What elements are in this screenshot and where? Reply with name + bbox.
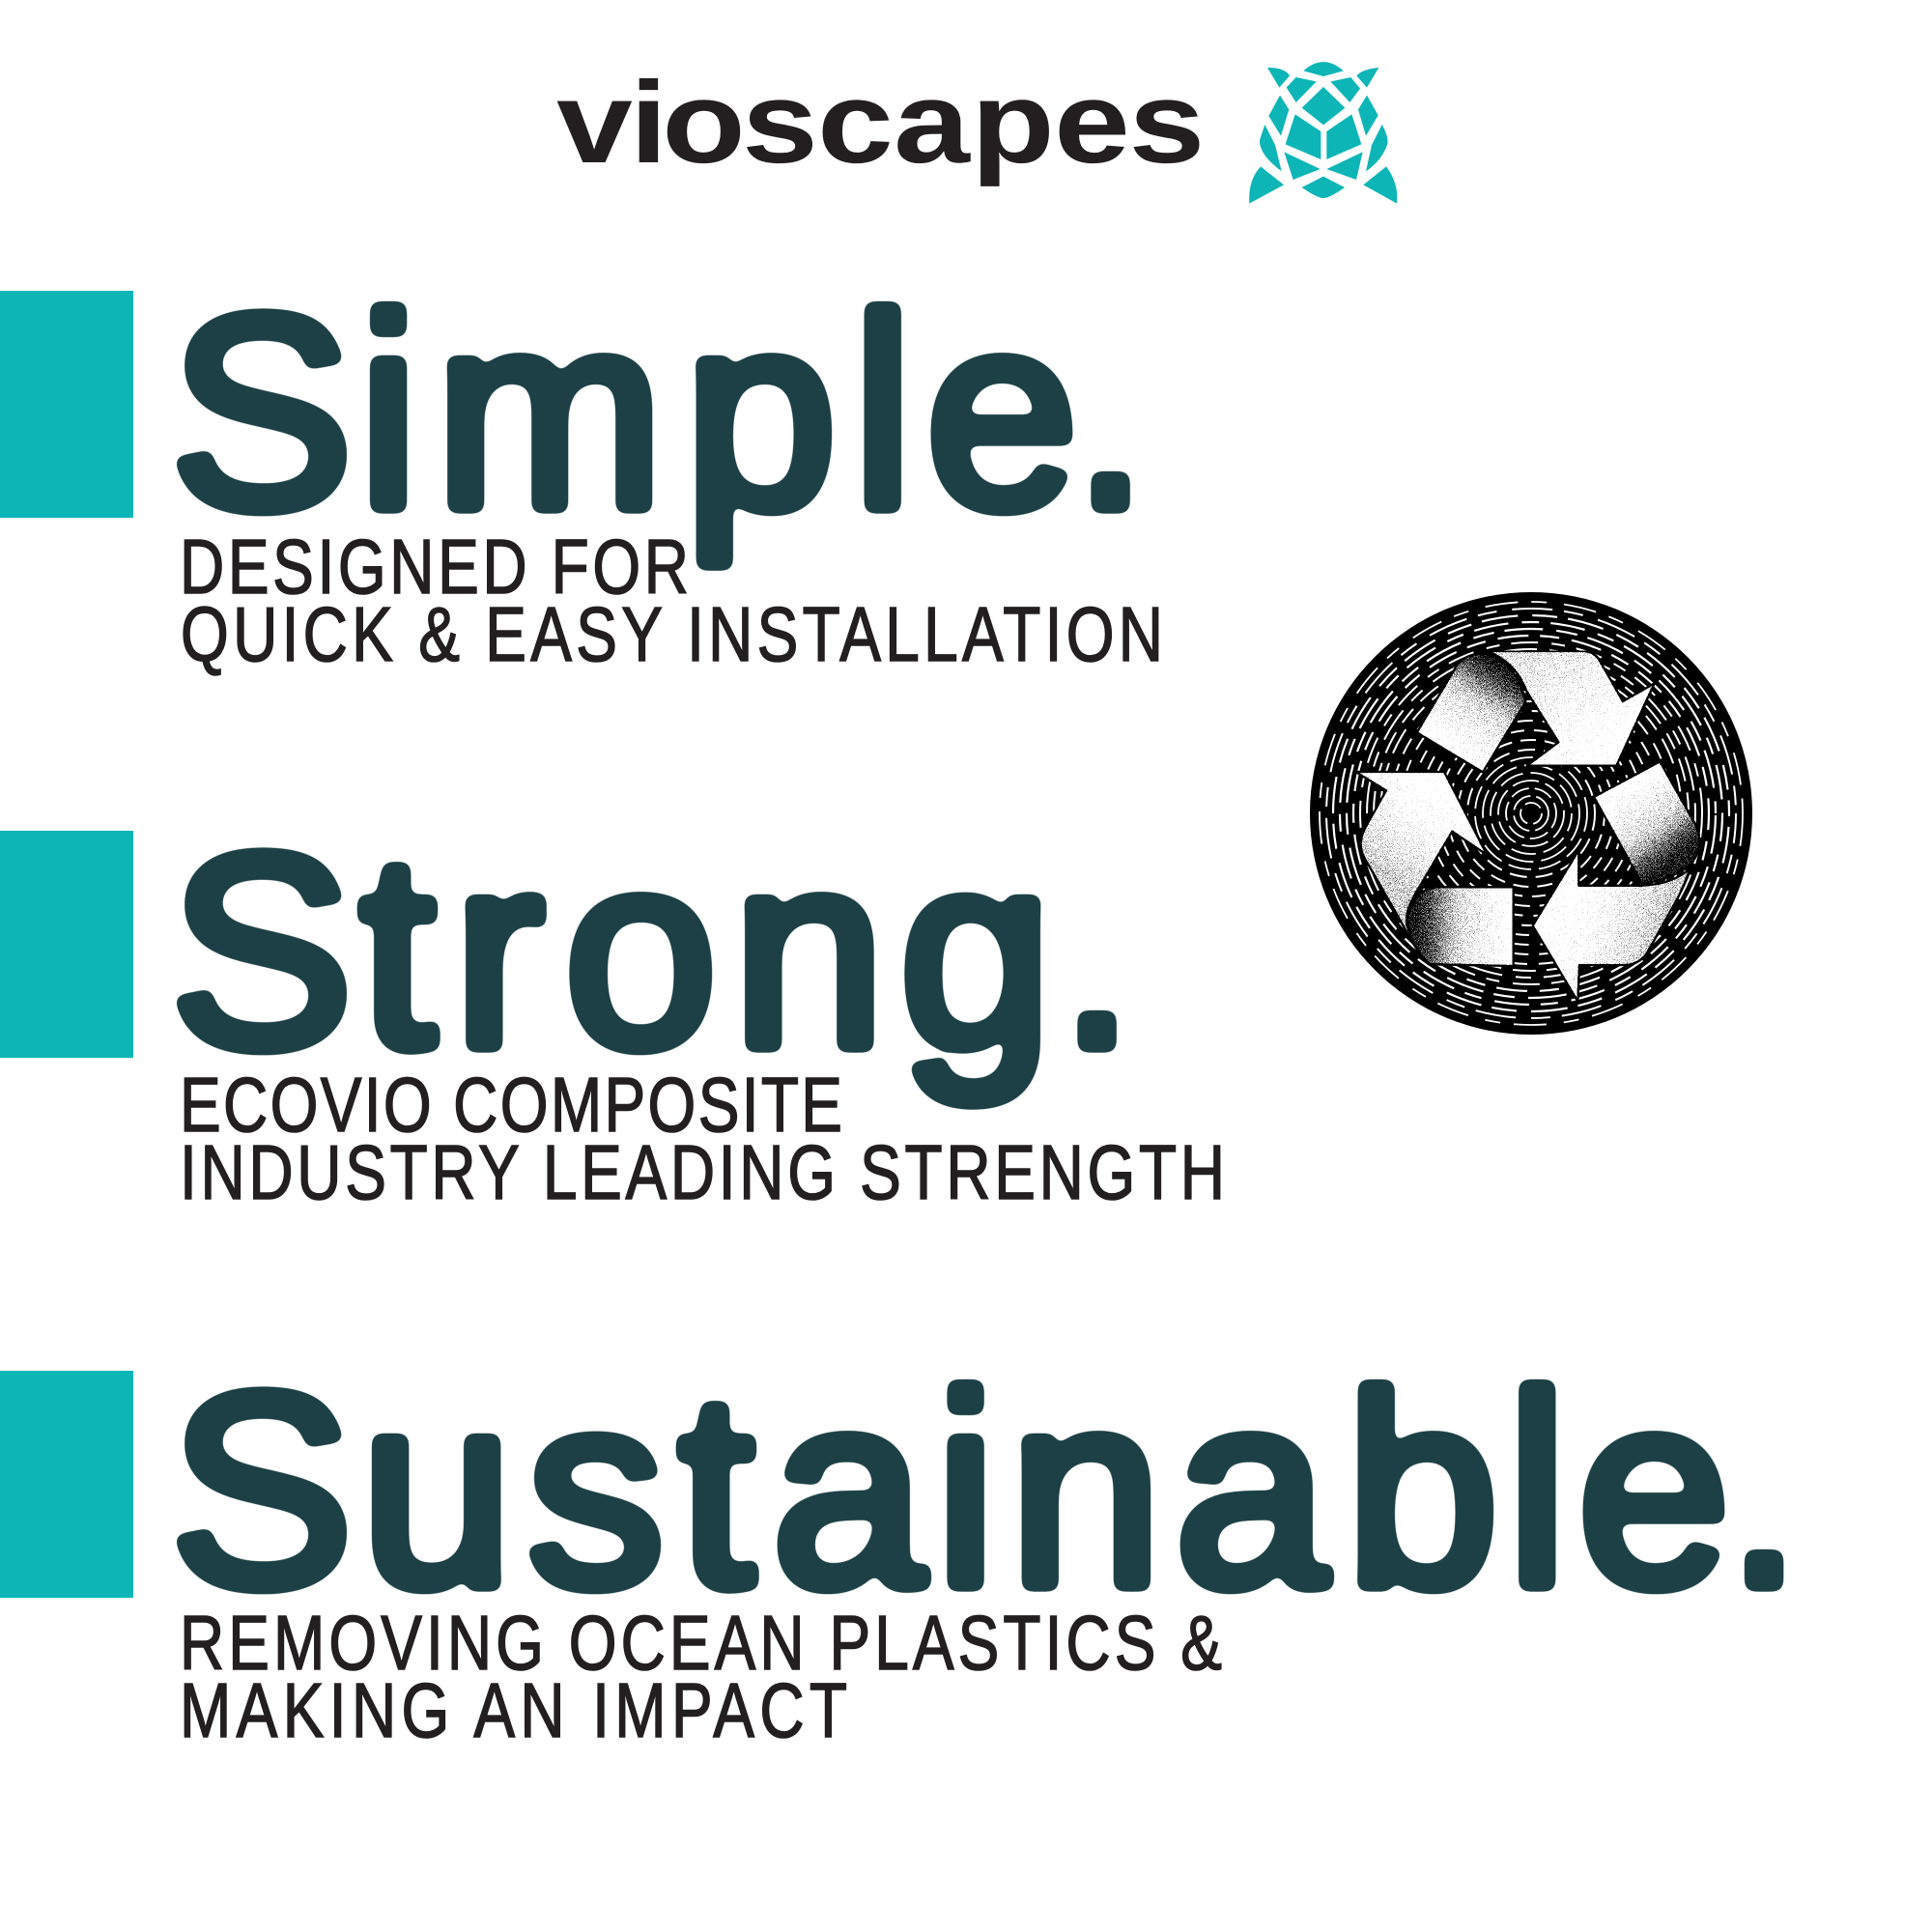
text block: strong: ECOVIO COMPOSITE xyxy=(180,1062,842,1149)
logo wordmark: vioscapes xyxy=(556,57,1205,187)
text block: strong: INDUSTRY LEADING STRENGTH xyxy=(180,1129,1225,1216)
text block: simple: DESIGNED FOR xyxy=(180,524,689,611)
heading: strong: Strong. xyxy=(170,798,1135,1106)
accent block xyxy=(0,1371,133,1598)
text block: sustainable: REMOVING OCEAN PLASTICS & xyxy=(180,1600,1222,1687)
heading: simple: Simple. xyxy=(170,259,1149,567)
panel: sustainable xyxy=(0,1337,1803,1754)
accent block xyxy=(0,291,133,518)
text block: simple: QUICK & EASY INSTALLATION xyxy=(181,591,1163,678)
text block: strong xyxy=(180,1062,1225,1216)
panel: strong xyxy=(0,798,1225,1216)
panel: simple xyxy=(0,259,1163,678)
accent block xyxy=(0,831,133,1058)
text block: sustainable: MAKING AN IMPACT xyxy=(180,1667,847,1754)
text block: sustainable xyxy=(180,1600,1222,1754)
icon: engraved recycling symbol xyxy=(1310,592,1752,1035)
text block: simple xyxy=(180,524,1163,678)
heading: sustainable: Sustainable. xyxy=(170,1337,1803,1644)
icon: turtle logo xyxy=(1249,62,1397,204)
